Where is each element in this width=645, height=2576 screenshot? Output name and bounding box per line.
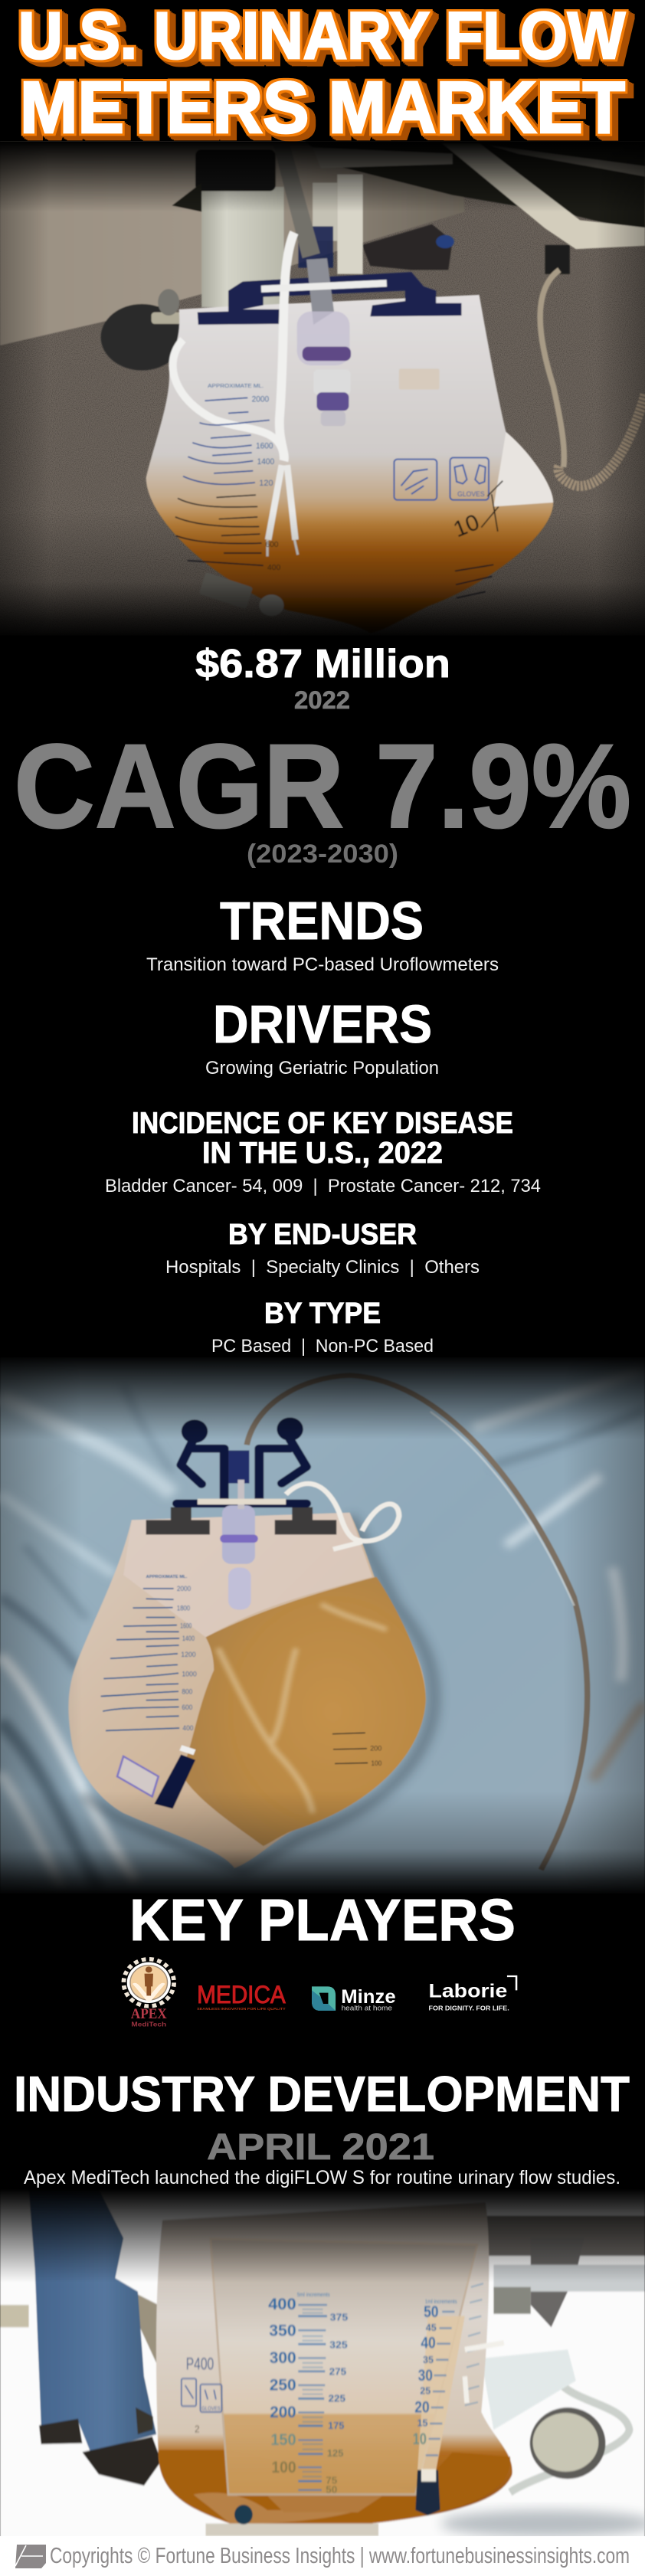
logo: Minze: health at home xyxy=(342,2005,392,2013)
bag labels and icons xyxy=(182,2355,221,2435)
logo: Apex MediTech: APEX xyxy=(131,2006,167,2022)
photo: urine collection meter under bed: 125 xyxy=(327,2448,344,2459)
by type xyxy=(211,1298,434,1357)
logo: Minze xyxy=(312,1986,396,2013)
logo: Apex MediTech: MediTech xyxy=(131,2021,166,2028)
photo: urine collection meter under bed: 300 xyxy=(270,2349,296,2367)
by type: PC Based | Non-PC Based xyxy=(211,1336,434,1357)
trends: TRENDS xyxy=(220,891,424,951)
logo: Minze: Minze xyxy=(341,1987,396,2008)
by type: BY TYPE xyxy=(264,1298,381,1330)
trends: Transition toward PC-based Uroflowmeters xyxy=(146,954,499,975)
bag labels and icons: P400 xyxy=(186,2355,214,2374)
scale markings xyxy=(183,398,270,484)
logo: Medica: SEAMLESS INNOVATION FOR LIFE QUALITY xyxy=(197,2007,286,2011)
photo: urine bag on blue sheet xyxy=(0,1340,645,1920)
photo: urine collection meter under bed: 5ml increments xyxy=(297,2293,330,2298)
incidence of key disease: IN THE U.S., 2022 xyxy=(202,1137,443,1170)
photo: urine bag hanging from bed frame xyxy=(0,141,645,660)
photo: urine collection meter under bed: 400 xyxy=(268,2296,296,2313)
photo: urine collection meter under bed: 10 xyxy=(413,2430,427,2448)
key player logos xyxy=(123,1959,516,2028)
by end-user: BY END-USER xyxy=(228,1219,417,1251)
photo: urine collection meter under bed: 250 xyxy=(270,2377,296,2394)
photo: urine bag hanging from bed frame: GLOVES xyxy=(457,490,485,498)
industry development: APRIL 2021 xyxy=(207,2127,434,2168)
scale markings xyxy=(101,1589,179,1730)
connector xyxy=(220,1480,258,1610)
hanger xyxy=(198,226,462,325)
photo: urine bag on blue sheet: 2000 xyxy=(177,1586,191,1593)
drivers xyxy=(205,994,439,1079)
photo: urine bag on blue sheet: 400 xyxy=(182,1724,193,1733)
incidence of key disease: INCIDENCE OF KEY DISEASE xyxy=(132,1107,513,1140)
photo: urine collection meter under bed: 50 xyxy=(424,2303,438,2321)
incidence of key disease xyxy=(105,1107,541,1196)
photo: urine collection meter under bed: 75 xyxy=(326,2475,337,2486)
jeans and shoes xyxy=(29,2189,162,2486)
title xyxy=(18,0,626,149)
photo: urine collection meter under bed: 150 xyxy=(270,2431,296,2449)
hanger xyxy=(177,1439,306,1504)
photo: urine bag on blue sheet: 200 xyxy=(370,1745,381,1753)
icon: hand washing and gloves xyxy=(394,457,489,500)
bag xyxy=(156,2202,512,2523)
market size: $6.87 Million xyxy=(195,642,450,686)
photo: urine collection meter under bed: 50 xyxy=(326,2484,337,2495)
industry development: INDUSTRY DEVELOPMENT xyxy=(14,2066,630,2122)
incidence of key disease: Bladder Cancer- 54, 009 | Prostate Cancer- 212, 734 xyxy=(105,1176,541,1196)
photo: urine collection meter under bed: 200 xyxy=(270,2404,296,2421)
photo: urine collection meter under bed: 225 xyxy=(329,2393,345,2404)
photo: urine collection meter under bed: 20 xyxy=(414,2399,430,2417)
photo: urine bag on blue sheet: 800 xyxy=(182,1688,192,1696)
title: METERS MARKET xyxy=(20,67,625,149)
photo: urine bag on blue sheet: 1000 xyxy=(182,1671,197,1678)
photo: urine bag hanging from bed frame: 400 xyxy=(267,564,281,572)
photo: urine collection meter under bed: 100 xyxy=(271,2459,296,2476)
key players heading: KEY PLAYERS xyxy=(129,1887,516,1953)
by end-user xyxy=(165,1219,480,1278)
photo: urine collection meter under bed: 45 xyxy=(426,2322,437,2333)
photo: urine bag hanging from bed frame: 600 xyxy=(265,541,279,549)
bag xyxy=(68,1513,426,1868)
beaker xyxy=(211,2239,477,2495)
drivers: DRIVERS xyxy=(213,994,432,1054)
photo: urine collection meter under bed: 35 xyxy=(423,2354,434,2365)
photo: urine bag hanging from bed frame: APPROXIMATE ML. xyxy=(208,384,264,389)
photo: urine bag on blue sheet: 1200 xyxy=(181,1651,196,1659)
logo: Laborie: Laborie xyxy=(428,1979,507,2002)
trends xyxy=(146,891,499,975)
photo: urine bag hanging from bed frame: 120 xyxy=(259,479,273,488)
drivers: Growing Geriatric Population xyxy=(205,1058,439,1079)
cart rail and wheel xyxy=(481,2349,630,2493)
logo: Laborie: FOR DIGNITY. FOR LIFE. xyxy=(428,2005,509,2012)
photo: urine bag hanging from bed frame: 10 xyxy=(450,510,483,542)
photo: urine collection meter under bed: 325 xyxy=(329,2339,348,2351)
photo: urine collection meter under bed: 350 xyxy=(269,2322,296,2339)
photo: urine bag on blue sheet: APPROXIMATE ML. xyxy=(146,1575,188,1579)
photo: urine collection meter under bed: 15 xyxy=(417,2417,428,2429)
photo: urine collection meter under bed: 1ml increments xyxy=(425,2299,457,2305)
logo: Laborie xyxy=(428,1976,516,2012)
connector xyxy=(297,312,351,426)
right side bag scale xyxy=(465,2283,483,2405)
photo: urine collection meter under bed xyxy=(0,2189,645,2546)
logo: Apex MediTech xyxy=(123,1959,174,2028)
bag labels and icons: 2 xyxy=(195,2424,200,2435)
tube xyxy=(247,1375,588,1870)
photo: urine collection meter under bed: 30 xyxy=(418,2367,433,2385)
photo: urine bag on blue sheet: 1400 xyxy=(182,1635,195,1643)
photo: urine collection meter under bed: 175 xyxy=(328,2421,345,2431)
photo: urine collection meter under bed: 25 xyxy=(420,2385,431,2397)
photo: urine collection meter under bed: 375 xyxy=(330,2312,348,2323)
industry development: Apex MediTech launched the digiFLOW S for routine urinary flow studies. xyxy=(24,2167,620,2188)
footer bar xyxy=(0,2536,645,2576)
market size xyxy=(195,642,450,714)
small cylinder xyxy=(417,2316,465,2470)
photo: urine bag on blue sheet: 1800 xyxy=(177,1605,190,1612)
photo: urine bag on blue sheet: 600 xyxy=(182,1704,192,1712)
by end-user: Hospitals | Specialty Clinics | Others xyxy=(165,1257,480,1278)
photo: urine bag on blue sheet: 100 xyxy=(371,1759,381,1768)
CAGR: (2023-2030) xyxy=(247,840,398,869)
photo: urine bag hanging from bed frame: 2000 xyxy=(252,395,269,404)
industry development xyxy=(14,2066,630,2188)
photo: urine collection meter under bed: 275 xyxy=(329,2366,346,2378)
logo: Medica: MEDICA xyxy=(197,1982,286,2009)
footer logo xyxy=(15,2545,46,2568)
photo: urine bag hanging from bed frame: 1600 xyxy=(256,441,273,450)
photo: urine collection meter under bed: 40 xyxy=(421,2335,436,2352)
photo: urine bag hanging from bed frame: 1400 xyxy=(257,457,274,466)
outlet valve xyxy=(117,1745,195,1808)
beaker scale xyxy=(298,2305,454,2490)
photo: urine bag on blue sheet: 1600 xyxy=(180,1622,192,1630)
bag labels and icons: GLOVES xyxy=(201,2404,221,2412)
market size: 2022 xyxy=(294,686,350,714)
